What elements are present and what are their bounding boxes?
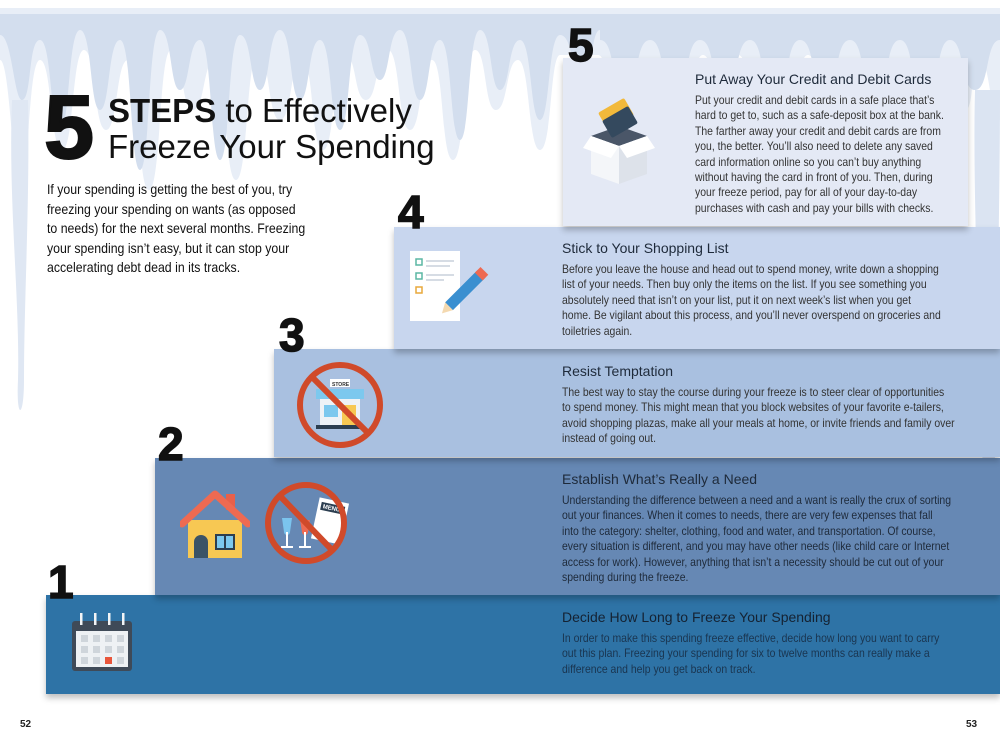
intro text: to needs) for the next several months. Freezing xyxy=(47,220,305,236)
text: step 2: Understanding the difference between a need and a want is really the crux of sorting xyxy=(562,494,951,507)
icon: house xyxy=(180,490,250,558)
page numbers: 52 xyxy=(20,719,31,730)
text: step 5: Put your credit and debit cards in a safe place that’s xyxy=(695,94,934,107)
text: step 2: every situation is different, and you may have other needs (like child care or Internet xyxy=(562,540,949,553)
icon: box with cards xyxy=(583,98,655,184)
text: step 5: purchases with cash and pay your bills with checks. xyxy=(695,202,933,215)
text: step 3: Resist Temptation xyxy=(562,363,673,379)
text: step 5 xyxy=(695,71,944,215)
icon: calendar xyxy=(72,613,132,671)
icon: no dining out: MENU xyxy=(322,504,341,514)
text: 2 xyxy=(158,418,184,470)
text: step 4: list of your needs. Then buy only the items on the list. If you see something you xyxy=(562,278,927,291)
text: step 4: absolutely need that isn’t on your list, put it on next week’s list when you get xyxy=(562,294,911,307)
text: step 4 xyxy=(562,240,941,338)
intro text: accelerating debt dead in its tracks. xyxy=(47,259,240,275)
panel: step 3 xyxy=(274,349,1000,457)
text: step 1 xyxy=(562,609,940,676)
text: 4 xyxy=(398,186,424,238)
text: 1 xyxy=(48,556,74,608)
text: step 5: you, the better. You’ll also need to delete any saved xyxy=(695,140,933,153)
text: step 5: The farther away your credit and debit cards are from xyxy=(695,125,941,138)
text: step 3: The best way to stay the course during your freeze is to steer clear of opportunities xyxy=(562,386,944,399)
text: step 4: Stick to Your Shopping List xyxy=(562,240,729,256)
text: step 4: home. Be vigilant about this process, and you’ll never overspend on groceries and xyxy=(562,309,941,322)
text: step 3: instead of going out. xyxy=(562,432,656,445)
text: step 2: Establish What’s Really a Need xyxy=(562,471,757,487)
intro text xyxy=(47,181,305,275)
icon: checklist and pencil xyxy=(410,251,488,321)
text: step 2: access for work). However, anything that isn’t a necessity should be cut out of your xyxy=(562,556,944,569)
text: step 5: card information online so you can’t buy anything xyxy=(695,156,921,169)
text: step 1: difference and help you get back on track. xyxy=(562,663,756,676)
text: step 2: into the category: shelter, clothing, food and water, and transportation. Of course, xyxy=(562,525,936,538)
number labels: 5 xyxy=(568,19,594,71)
intro text: your spending isn’t easy, but it can stop your xyxy=(47,240,289,256)
text: step 3: to spend money. This might mean that you block websites of your favorite e-tailers, xyxy=(562,401,944,414)
text: step 3 xyxy=(562,363,955,445)
text: step 2 xyxy=(562,471,951,584)
text: step 5: without having the card in front of you. Then, during xyxy=(695,171,933,184)
title: STEPS to Effectively xyxy=(108,92,412,129)
text: step 5: your freeze period, pay for all of your day-to-day xyxy=(695,186,917,199)
title: Freeze Your Spending xyxy=(108,128,435,165)
panel: step 4 xyxy=(394,227,1000,349)
text: step 4: toiletries again. xyxy=(562,325,632,338)
text: step 5: hard to get to, such as a safe-deposit box at the bank. xyxy=(695,109,944,122)
panel: step 2 xyxy=(155,458,1000,595)
icon: no store: STORE xyxy=(332,382,350,388)
text: 53 xyxy=(966,719,977,730)
text: step 2: spending during the freeze. xyxy=(562,571,688,584)
text: step 5: Put Away Your Credit and Debit Cards xyxy=(695,71,931,87)
text: step 4: Before you leave the house and head out to spend money, write down a shopping xyxy=(562,263,939,276)
text: step 1: In order to make this spending freeze effective, decide how long you want to carry xyxy=(562,632,939,645)
text: step 1: out this plan. Freezing your spending for six to twelve months can really make a xyxy=(562,647,930,660)
text: step 3: avoid shopping plazas, make all your meals at home, or invite friends and family over xyxy=(562,417,955,430)
text: step 1: Decide How Long to Freeze Your Spending xyxy=(562,609,831,625)
title xyxy=(44,78,435,178)
text: step 2: out your finances. When it comes to needs, there are very few expenses that fall xyxy=(562,509,933,522)
icon: no store xyxy=(297,362,383,448)
intro text: freezing your spending on wants (as opposed xyxy=(47,200,296,216)
title: 5 xyxy=(44,78,94,178)
text: 3 xyxy=(279,309,305,361)
intro text: If your spending is getting the best of you, try xyxy=(47,181,292,197)
icon: no dining out xyxy=(265,482,349,564)
panel: step 1 xyxy=(46,595,1000,694)
panel: step 5 xyxy=(563,58,968,226)
